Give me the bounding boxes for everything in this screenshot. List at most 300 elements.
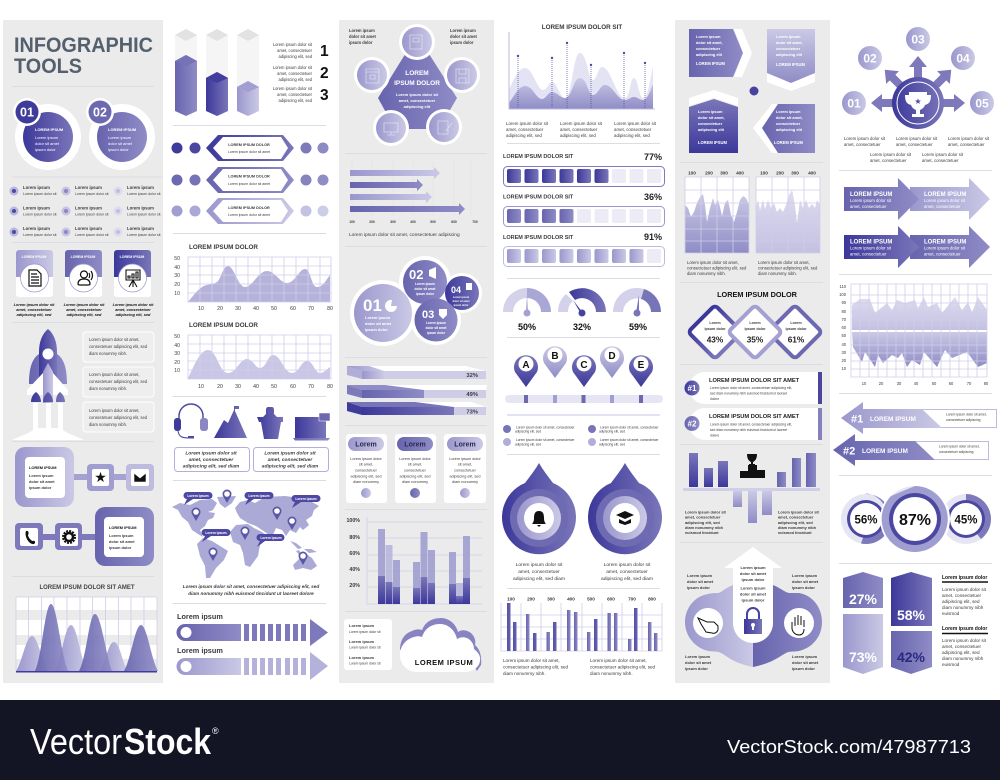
- numbered bubbles: dolor sit amet: [415, 287, 436, 291]
- location pins: [505, 346, 663, 403]
- panel: column 1 background: [3, 20, 163, 683]
- footer bar: Vector: [30, 721, 122, 762]
- arrow banners: LOREM IPSUM: [924, 192, 966, 198]
- isometric bars: Lorem ipsum dolor sit: [273, 86, 313, 91]
- chart: mirrored area: [839, 284, 989, 386]
- charts: spiky areas: Lorem ipsum dolor sit amet,: [758, 260, 810, 265]
- numbered circles: dolor sit amet: [35, 141, 60, 146]
- chart: arrow bars: 300: [390, 220, 396, 224]
- icon: phone: [26, 531, 35, 544]
- chart: area 2: 40: [174, 343, 180, 349]
- progress bars: LOREM IPSUM DOLOR SIT: [503, 235, 574, 241]
- pill cards: consectetuer: [404, 468, 427, 472]
- chevron text blocks: consectetuer: [776, 121, 801, 126]
- cloud: [400, 618, 481, 672]
- chart: area 1: [174, 244, 333, 312]
- chart: mirrored area: 70: [967, 381, 972, 386]
- numbered circles: 01: [20, 106, 34, 120]
- hexagon labels with dots: Lorem ipsum dolor sit amet: [228, 213, 270, 217]
- charts: spiky areas: diam nonummy nibh.: [687, 271, 726, 276]
- numbered ribbon arrows: LOREM IPSUM: [870, 416, 916, 423]
- numbered ribbon arrows: Lorem ipsum dolor sit amet,: [946, 412, 987, 416]
- icon: presentation board: [126, 270, 140, 287]
- chart: arrow bars: 100: [349, 220, 355, 224]
- trophy radial diagram: amet, consectetuer: [896, 142, 933, 147]
- legend: Lorem ipsum dolor sit amet, consectetuer: [600, 438, 659, 442]
- cloud arrow diagram: dolor sit amet: [792, 579, 819, 584]
- icon cards: amet, consectetuer: [115, 307, 151, 312]
- drop rings: amet, consectetuer: [518, 569, 560, 575]
- chart: area 1: 80: [327, 306, 333, 312]
- bullet list grid: Lorem ipsum: [127, 226, 154, 231]
- icon: mountain flag: [214, 406, 247, 438]
- chart: arrow bars: 500: [430, 220, 436, 224]
- numbered circles: LOREM IPSUM: [35, 127, 64, 132]
- chart: arrow bars: 700: [472, 220, 478, 224]
- hexagon percentages: 73%: [849, 649, 878, 665]
- cloud arrow diagram: Lorem ipsum: [687, 573, 713, 578]
- chart: mirrored area: 50: [841, 333, 847, 338]
- caption boxes: Lorem ipsum dolor sit: [185, 450, 237, 456]
- icon: headset: [174, 404, 208, 438]
- numbered bubbles: Lorem ipsum: [453, 295, 470, 299]
- icon: star: ★: [94, 469, 107, 485]
- isometric bars: amet, consectetuer: [277, 71, 313, 76]
- icon: pointing hand: [698, 618, 718, 633]
- chart: paired bars: [501, 596, 662, 676]
- icon: trophy podium: [740, 454, 765, 478]
- numbered bubbles: Lorem ipsum: [365, 315, 391, 320]
- numbered banners: sed diam nonummy nibh euismod tincidunt ut laoreet: [710, 428, 787, 432]
- chart: layered area with pins: Lorem ipsum dolor sit: [614, 121, 657, 126]
- title: [14, 34, 153, 78]
- bullet list grid: Lorem ipsum: [75, 185, 102, 190]
- chevron text blocks: dolor sit amet,: [776, 115, 803, 120]
- cloud arrow diagram: dolor sit amet: [740, 592, 767, 596]
- rounded diamonds: [688, 290, 822, 359]
- chart: layered area with pins: adipiscing elit, sed: [614, 133, 650, 138]
- bullet list grid: Lorem ipsum dolor sit: [127, 233, 160, 237]
- numbered banners: #2: [688, 420, 697, 428]
- numbered bubbles: 01: [363, 296, 382, 315]
- chart: stacked bars: 20%: [349, 583, 360, 589]
- world map: Lorem ipsum: [187, 494, 209, 498]
- pill cards: sit amet,: [408, 462, 422, 466]
- arrow banners: Lorem ipsum dolor sit: [924, 198, 966, 203]
- pill cards: consectetuer: [454, 468, 477, 472]
- chevron text blocks: LOREM IPSUM: [776, 62, 805, 67]
- flow diagram: dolor sit amet: [29, 479, 55, 484]
- chart: paired bars: 200: [527, 596, 535, 602]
- numbered banners: LOREM IPSUM DOLOR SIT AMET: [709, 378, 800, 384]
- legend: adipiscing elit, sed: [599, 430, 625, 434]
- numbered ribbon arrows: #2: [843, 446, 855, 458]
- text boxes: Lorem ipsum dolor sit amet,: [89, 372, 140, 377]
- bullet list grid: Lorem ipsum: [23, 226, 50, 231]
- chart: area 2: 60: [290, 384, 296, 390]
- arrow banners: amet, consectetuer: [850, 204, 887, 209]
- chevron text blocks: consectetuer: [776, 46, 801, 51]
- pentagon diagram: dolor sit amet: [349, 34, 376, 39]
- numbered circles: [13, 98, 155, 170]
- chart: arrow bars: [349, 161, 478, 238]
- world map: Lorem ipsum: [248, 494, 270, 498]
- progress bars: 36%: [644, 192, 662, 202]
- cloud arrow diagram: Lorem ipsum: [740, 586, 766, 590]
- charts: spiky areas: 300: [720, 170, 728, 176]
- icon row: [174, 404, 330, 440]
- arrow progress bars: Lorem ipsum: [177, 612, 223, 621]
- isometric bars: 1: [320, 43, 329, 60]
- icon: gear: [63, 531, 75, 543]
- icon: trophy: [905, 92, 931, 117]
- arrow banners: LOREM IPSUM: [850, 192, 892, 198]
- location pins: E: [638, 360, 645, 371]
- trophy radial diagram: 05: [975, 96, 989, 110]
- chart: area 1: 40: [174, 265, 180, 271]
- pentagon diagram: Lorem ipsum: [349, 28, 375, 33]
- numbered banners: [684, 372, 822, 440]
- chart: paired bars: 100: [507, 596, 515, 602]
- footer bar: VectorStock.com/47987713: [727, 737, 971, 757]
- chevron text blocks: adipiscing elit: [776, 52, 803, 57]
- trophy radial diagram: [842, 27, 994, 163]
- cloud arrow diagram: ipsum dolor: [742, 598, 765, 602]
- pill cards: Lorem ipsum dolor: [399, 457, 431, 461]
- cloud arrow diagram: dolor sit amet: [687, 579, 714, 584]
- footer bar: Stock: [124, 721, 212, 762]
- hexagon labels with dots: Lorem ipsum dolor sit amet: [228, 150, 270, 154]
- legend: adipiscing elit, sed: [599, 442, 625, 446]
- chart: mirrored area: 70: [841, 317, 847, 322]
- charts: spiky areas: 100: [760, 170, 768, 176]
- chart: area 2: [174, 322, 333, 390]
- charts: spiky areas: 300: [791, 170, 799, 176]
- chart: paired bars: Lorem ipsum dolor sit amet,: [503, 658, 560, 663]
- chart: layered area with pins: Lorem ipsum dolor sit: [560, 121, 603, 126]
- chart: podium bars: diam nonummy nibh: [778, 525, 817, 530]
- charts: spiky areas: 400: [808, 170, 816, 176]
- world map: [172, 490, 320, 578]
- chart: podium bars: euismod tincidunt: [778, 530, 812, 535]
- icon cards: adipiscing elit, sed: [17, 312, 52, 317]
- numbered circles: LOREM IPSUM: [108, 127, 137, 132]
- footer bar: [0, 700, 1000, 780]
- arrow banners: [844, 178, 990, 268]
- icon cards: adipiscing elit, sed: [116, 312, 151, 317]
- trophy radial diagram: 03: [911, 32, 925, 46]
- chevron text blocks: Lorem ipsum: [776, 34, 801, 39]
- chart: stacked bars: 100%: [346, 518, 360, 524]
- 3D percent bars: [347, 366, 487, 416]
- bullet list grid: Lorem ipsum dolor sit: [23, 192, 56, 196]
- pill cards: Lorem: [454, 442, 476, 448]
- chart: paired bars: Lorem ipsum dolor sit amet,: [590, 658, 647, 663]
- chart: podium bars: diam nonummy nibh: [685, 525, 724, 530]
- chart: area 1: 20: [174, 282, 180, 288]
- progress bars: 91%: [644, 232, 662, 242]
- world map: Lorem ipsum: [260, 536, 282, 540]
- bullet list grid: Lorem ipsum: [75, 206, 102, 210]
- chevron text blocks: Lorem ipsum: [698, 109, 723, 114]
- arrow banners: amet, consectetuer: [924, 252, 961, 256]
- donut charts: 45%: [954, 514, 978, 526]
- drop rings: Lorem ipsum dolor sit: [516, 562, 563, 568]
- chart: layered area with pins: LOREM IPSUM DOLOR SIT: [542, 24, 622, 31]
- rounded diamonds: ipsum dolor: [744, 327, 766, 331]
- rounded diamonds: Lorem: [749, 321, 761, 325]
- chart: area 2: 50: [174, 334, 180, 340]
- chart: mirrored area: 10: [862, 381, 867, 386]
- chevron text blocks: consectetuer: [698, 121, 723, 126]
- pentagon diagram: dolor sit amet: [450, 34, 477, 39]
- hexagon percentages: 27%: [849, 591, 878, 607]
- hexagon percentages: Lorem ipsum dolor sit: [942, 587, 987, 592]
- chart: area 1: LOREM IPSUM DOLOR: [189, 244, 258, 251]
- icon: bell: [532, 511, 546, 527]
- chart: podium bars: Lorem ipsum dolor sit: [778, 510, 820, 514]
- numbered ribbon arrows: [833, 402, 996, 466]
- trophy radial diagram: ★: [914, 97, 922, 106]
- title: INFOGRAPHIC: [14, 34, 153, 57]
- chart: paired bars: diam nonummy nibh.: [503, 671, 546, 676]
- chart: area 1: 10: [174, 291, 180, 297]
- cloud arrow diagram: ipsum dolor: [792, 585, 815, 590]
- pill cards: Lorem: [355, 442, 377, 448]
- text boxes: Lorem ipsum dolor sit amet,: [89, 408, 140, 413]
- chart: paired bars: 500: [587, 596, 595, 602]
- icon: open hand: [792, 615, 804, 635]
- icon cards: LOREM IPSUM: [120, 255, 144, 259]
- hexagon labels with dots: LOREM IPSUM DOLOR: [228, 206, 270, 210]
- chevron text blocks: LOREM IPSUM: [774, 140, 803, 145]
- flow diagram: ipsum dolor: [29, 485, 52, 490]
- arrow banners: amet, consectetuer: [924, 204, 961, 209]
- isometric bars: [175, 29, 329, 116]
- numbered banners: dolore: [710, 434, 719, 438]
- chevron text blocks: adipiscing elit: [698, 127, 725, 132]
- charts: spiky areas: 200: [705, 170, 713, 176]
- flow diagram: Lorem ipsum: [109, 533, 134, 538]
- chart: area 1: 40: [253, 306, 259, 312]
- gauges: 50%: [518, 322, 536, 332]
- pentagon diagram: Lorem ipsum: [450, 28, 476, 33]
- chart: layered area with pins: amet, consectetuer: [614, 127, 652, 132]
- chart: area 1: 10: [198, 306, 204, 312]
- chart: podium bars: adipiscing elit, sed: [778, 520, 813, 525]
- chart: mirrored area: 90: [841, 300, 847, 305]
- pentagon diagram: adipiscing elit: [404, 104, 431, 109]
- world map: Lorem ipsum: [205, 531, 227, 535]
- location pins: A: [522, 360, 530, 371]
- isometric bars: amet, consectetuer: [277, 48, 313, 53]
- arrow progress bars: [176, 612, 328, 680]
- chart: stacked bars: 60%: [349, 551, 360, 557]
- chart: podium bars: amet, consectetuer: [685, 514, 721, 520]
- isometric bars: 3: [320, 87, 329, 104]
- arrow progress bars: Lorem ipsum: [177, 646, 223, 655]
- chart: mirrored area: 80: [984, 381, 989, 386]
- chart: stacked bars: 80%: [349, 535, 360, 541]
- chart: arrow bars: 200: [369, 220, 375, 224]
- cloud arrow diagram: Lorem ipsum: [685, 654, 711, 659]
- chart: mirrored area: 40: [914, 381, 919, 386]
- flow diagram: ipsum dolor: [109, 545, 132, 550]
- list box: Lorem ipsum dolor sit: [349, 646, 381, 650]
- chart: paired bars: 600: [607, 596, 615, 602]
- pill cards: Lorem ipsum dolor: [350, 457, 382, 461]
- pentagon diagram: LOREM: [405, 70, 429, 77]
- chart: paired bars: 700: [628, 596, 636, 602]
- hexagon percentages: 42%: [897, 649, 926, 665]
- caption boxes: Lorem ipsum dolor sit: [264, 450, 316, 456]
- charts: spiky areas: diam nonummy nibh.: [758, 271, 797, 276]
- trophy radial diagram: 02: [863, 52, 877, 66]
- location pins: B: [551, 351, 559, 362]
- icon: padlock: [744, 608, 762, 634]
- chart: mirrored area: 10: [841, 366, 847, 371]
- cloud arrow diagram: Lorem ipsum: [740, 565, 766, 570]
- cloud arrow diagram: ipsum dolor: [687, 585, 710, 590]
- flow diagram: LOREM IPSUM: [109, 525, 136, 530]
- trophy radial diagram: amet, consectetuer: [844, 142, 881, 147]
- list box: Lorem ipsum: [349, 639, 375, 644]
- chart: podium bars: adipiscing elit, sed: [685, 520, 720, 525]
- hexagon percentages: euismod: [942, 662, 960, 667]
- cloud arrow diagram: [685, 547, 822, 671]
- chevron text blocks: dolor sit amet,: [776, 40, 803, 45]
- 3D percent bars: 32%: [466, 373, 478, 379]
- drop rings: amet, consectetuer: [606, 569, 648, 575]
- chevron text blocks: [689, 29, 815, 153]
- hexagon percentages: Lorem ipsum dolor: [942, 626, 987, 632]
- trophy radial diagram: 04: [956, 52, 970, 66]
- icon: person speaking: [78, 271, 92, 285]
- hexagon labels with dots: LOREM IPSUM DOLOR: [228, 174, 270, 178]
- numbered bubbles: 04: [451, 285, 461, 295]
- numbered bubbles: Lorem ipsum: [426, 321, 446, 325]
- numbered bubbles: Lorem ipsum: [415, 282, 435, 286]
- chart: paired bars: diam nonummy nibh.: [590, 671, 633, 676]
- bullet list grid: Lorem ipsum dolor sit: [23, 212, 56, 216]
- icon: hand: [466, 283, 472, 290]
- numbered banners: dolore: [710, 397, 719, 401]
- numbered circles: Lorem ipsum: [35, 135, 59, 140]
- chart: area 2: 30: [174, 351, 180, 357]
- chart: area 1: 30: [174, 273, 180, 279]
- bullet list grid: Lorem ipsum dolor sit: [75, 212, 108, 216]
- list box: [344, 619, 392, 670]
- hexagon percentages: euismod: [942, 611, 960, 616]
- location pins: D: [608, 351, 616, 362]
- icon cards: LOREM IPSUM: [71, 255, 95, 259]
- bullet list grid: Lorem ipsum dolor sit: [127, 192, 160, 196]
- chevron text blocks: LOREM IPSUM: [696, 61, 725, 66]
- numbered circles: ipsum dolor: [35, 147, 56, 152]
- bullet list grid: Lorem ipsum: [23, 206, 50, 210]
- rounded diamonds: 61%: [788, 334, 805, 344]
- icon cards: amet, consectetuer: [66, 307, 102, 312]
- rounded diamonds: LOREM IPSUM DOLOR: [717, 290, 798, 299]
- isometric bars: Lorem ipsum dolor sit: [273, 65, 313, 70]
- pill cards: sit amet,: [458, 462, 472, 466]
- icon cards: amet, consectetuer: [16, 307, 52, 312]
- pill cards: Lorem: [404, 442, 426, 448]
- chart: area 1: 20: [217, 306, 223, 312]
- icon: shield: [439, 309, 447, 319]
- hexagon percentages: diam nonummy nibh: [942, 656, 984, 661]
- chevron text blocks: adipiscing elit: [696, 52, 723, 57]
- isometric bars: adipiscing elit, sed: [279, 98, 313, 103]
- trophy radial diagram: amet, consectetuer: [922, 158, 959, 163]
- numbered circles: dolor sit amet: [108, 141, 133, 146]
- text boxes: consectetuer adipiscing elit, sed: [89, 344, 148, 349]
- chart: area 2: 10: [174, 368, 180, 374]
- icon cards: [14, 250, 154, 317]
- trophy radial diagram: Lorem ipsum dolor sit: [844, 136, 886, 141]
- numbered bubbles: ipsum dolor: [454, 303, 468, 307]
- chart: area 1: 50: [174, 256, 180, 262]
- panel: column 5 background: [675, 20, 830, 683]
- numbered bubbles: 02: [409, 267, 423, 282]
- chevron text blocks: adipiscing elit: [776, 127, 803, 132]
- icon: graduation cap: [616, 511, 634, 525]
- cloud arrow diagram: dolor sit amet: [740, 571, 767, 576]
- chart: layered area with pins: amet, consectetuer: [560, 127, 598, 132]
- legend: [503, 425, 659, 446]
- chart: stacked bars: 40%: [349, 567, 360, 573]
- pill cards: adipiscing elit, sed: [449, 474, 481, 478]
- cloud arrow diagram: ipsum dolor: [792, 666, 815, 671]
- text boxes: Lorem ipsum dolor sit amet,: [89, 337, 140, 342]
- icon: podium: [257, 407, 283, 439]
- icon: pie: [385, 300, 397, 312]
- pentagon diagram: ipsum dolor: [349, 40, 373, 45]
- caption boxes: amet, consectetuer: [189, 457, 234, 463]
- caption boxes: [174, 448, 328, 472]
- map caption: diam nonummy nibh euismod tincidunt ut laoreet dolore: [188, 591, 314, 596]
- drop rings: Lorem ipsum dolor sit: [604, 562, 651, 568]
- numbered bubbles: dolor sit amet: [426, 326, 447, 330]
- numbered bubbles: 03: [422, 309, 434, 321]
- chart: area 1: 70: [308, 306, 314, 312]
- flow diagram: [15, 447, 154, 566]
- pentagon diagram: [349, 24, 480, 146]
- chart: mirrored area: 110: [839, 284, 847, 289]
- cloud arrow diagram: dolor sit amet: [792, 660, 819, 665]
- rounded diamonds: 35%: [747, 334, 764, 344]
- donut charts: 56%: [854, 514, 878, 526]
- bullet list grid: Lorem ipsum dolor sit: [75, 192, 108, 196]
- pill cards: [346, 434, 486, 503]
- icon: document: [29, 270, 41, 286]
- numbered banners: sed diam nonummy nibh euismod tincidunt ut laoreet: [710, 392, 787, 396]
- pill cards: adipiscing elit, sed: [350, 474, 382, 478]
- hexagon percentages: adipiscing elit, sed: [942, 650, 980, 655]
- gauges: 32%: [573, 322, 591, 332]
- chart: area 2: 70: [308, 384, 314, 390]
- chart: arrow bars: 600: [451, 220, 457, 224]
- title: TOOLS: [14, 55, 82, 78]
- rounded diamonds: ipsum dolor: [704, 327, 726, 331]
- text boxes: diam nonummy nibh.: [89, 386, 127, 391]
- pentagon diagram: Lorem ipsum dolor sit: [396, 92, 439, 97]
- flow diagram: Lorem ipsum: [29, 473, 54, 478]
- pentagon diagram: amet, consectetuer: [399, 98, 436, 103]
- trophy radial diagram: Lorem ipsum dolor sit: [922, 152, 964, 157]
- bullet list grid: Lorem ipsum dolor sit: [23, 233, 56, 237]
- legend: Lorem ipsum dolor sit amet, consectetuer: [516, 438, 575, 442]
